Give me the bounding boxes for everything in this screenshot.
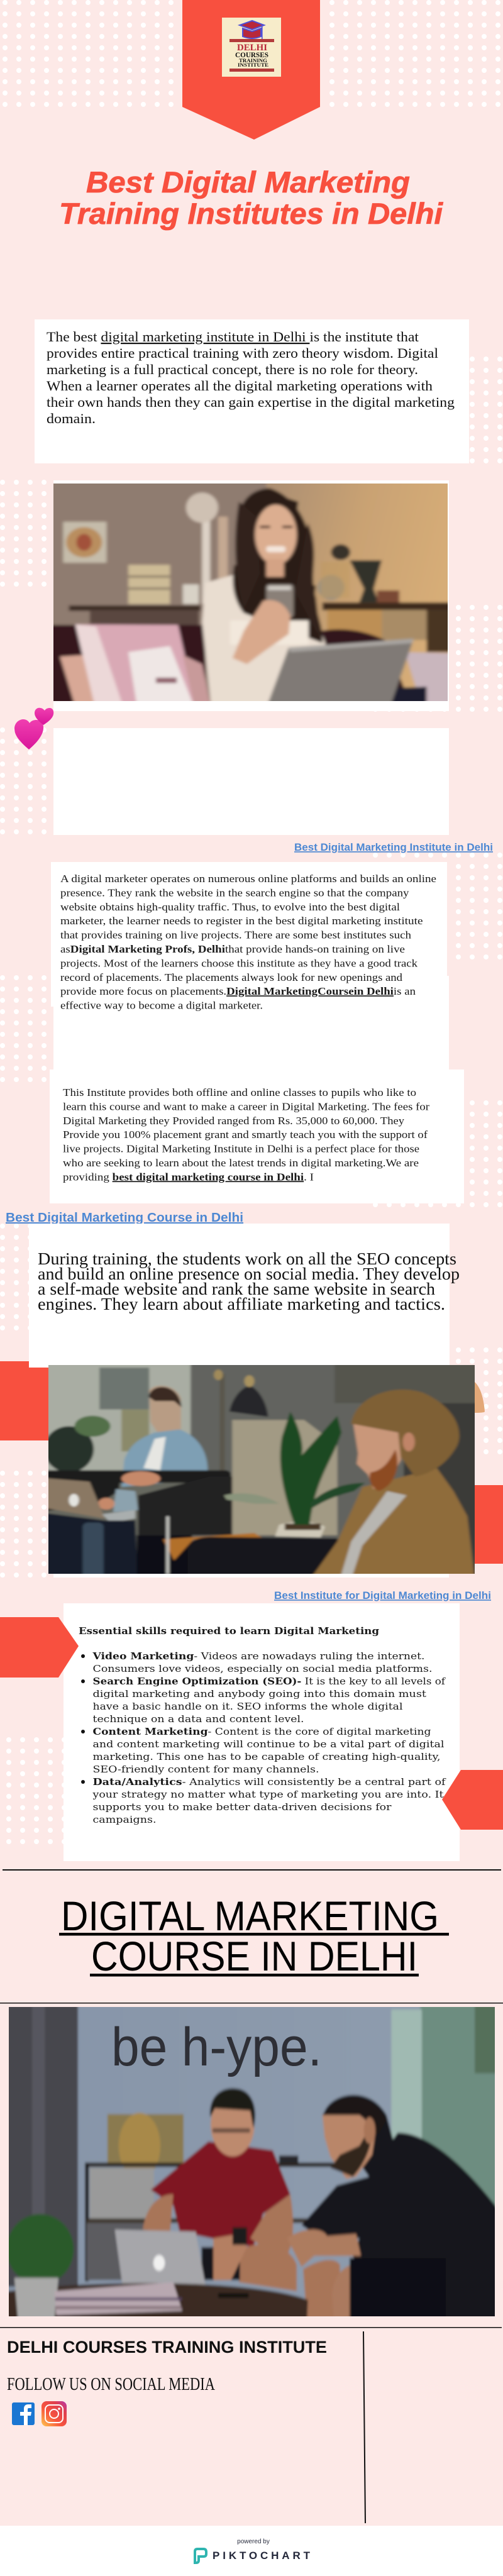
footer: follow us: FOLLOW US ON SOCIAL MEDIA <box>7 2375 216 2394</box>
paragraph: classes and fees: Digital Marketing they Provided ranged from Rs. 35,000 to 60,000. They <box>63 1115 405 1127</box>
paragraph: during training: engines. They learn about affiliate marketing and tactics. <box>38 1295 445 1313</box>
paragraph: classes and fees: live projects. Digital Marketing Institute in Delhi is a perfect place for those <box>63 1143 419 1155</box>
skills bullet list: digital marketing and anybody going into this domain must <box>93 1688 426 1700</box>
heading: digital marketing course in delhi <box>59 1893 449 1979</box>
vertical divider line <box>363 2331 365 2523</box>
skills bullet list: and content marketing will continue to be a vital part of digital <box>93 1739 445 1750</box>
intro paragraph: provides entire practical training with zero theory wisdom. Digital <box>47 345 438 361</box>
logo: TRAINING <box>239 57 267 64</box>
icon: pink hearts <box>14 708 53 749</box>
heading: essential skills: Essential skills required to learn Digital Marketing <box>79 1625 380 1637</box>
photo: two men at laptop: be h-ype. <box>111 2017 322 2077</box>
icon: facebook <box>12 2402 35 2425</box>
heading: digital marketing course in delhi: DIGITAL MARKETING <box>61 1893 439 1939</box>
link: best digital marketing course in delhi: Best Digital Marketing Course in Delhi <box>6 1211 243 1225</box>
skills bullet list: SEO-friendly content for many channels. <box>93 1764 319 1775</box>
footer: powered by piktochart <box>0 2526 503 2576</box>
skills bullet list: campaigns. <box>93 1814 156 1825</box>
intro paragraph: The best digital marketing institute in Delhi is the institute that <box>47 329 419 345</box>
red banner with logo <box>182 0 320 140</box>
skills bullet list: Search Engine Optimization (SEO)- It is the key to all levels of <box>93 1676 446 1687</box>
skills bullet list: marketing. This one has to be capable of creating high-quality, <box>93 1751 440 1762</box>
red arrow shape right <box>442 1770 503 1830</box>
paragraph: digital marketer: marketer, the learner needs to register in the best digital marketing institute <box>60 915 423 927</box>
red accent block left <box>0 1361 48 1440</box>
decorative dot pattern blocks <box>0 0 503 1847</box>
paragraph: classes and fees: This Institute provides both offline and online classes to pupils who like to <box>63 1086 416 1098</box>
paragraph: digital marketer: effective way to become a digital marketer. <box>60 1000 263 1012</box>
skills bullet list: technique on a data and content level. <box>93 1713 304 1725</box>
panel: institute classes text <box>50 1070 464 1203</box>
skills bullet list: Content Marketing - Content is the core of digital marketing <box>93 1726 431 1737</box>
paragraph: digital marketer: A digital marketer operates on numerous online platforms and builds an online <box>60 873 436 885</box>
paragraph: digital marketer <box>60 873 436 1012</box>
paragraph: during training: a self-made website and rank the same website in search <box>38 1280 436 1298</box>
skills bullet list: Data/Analytics - Analytics will consistently be a central part of <box>93 1776 446 1788</box>
title: Best Digital Marketing <box>86 165 410 199</box>
paragraph: digital marketer: asDigital Marketing Profs, Delhi that provide hands-on training on live <box>60 943 405 955</box>
intro paragraph <box>47 329 455 426</box>
intro paragraph: domain. <box>47 411 96 426</box>
skills bullet list: Consumers love videos, especially on social media platforms. <box>93 1663 433 1674</box>
skills bullet list: have a basic handle on it. SEO informs the whole digital <box>93 1701 403 1712</box>
paragraph: classes and fees: Provide you 100% placement grant and smartly teach you with the support of <box>63 1129 428 1141</box>
footer: powered by piktochart: powered by <box>237 2538 270 2545</box>
paragraph: classes and fees: who are seeking to learn about the latest trends in digital marketing.We are <box>63 1157 419 1169</box>
panel: photo of woman with phone and laptop <box>53 480 449 711</box>
skills bullet list: Video Marketing - Videos are nowadays ruling the internet. <box>92 1650 425 1662</box>
paragraph: classes and fees: learn this course and want to make a career in Digital Marketing. The fees for <box>63 1100 429 1112</box>
logo: COURSES <box>235 50 268 59</box>
panel: photo of two men working <box>48 1365 485 1578</box>
intro paragraph: marketing is a full practical concept, there is no role for theory. <box>47 362 418 377</box>
paragraph: during training: and build an online presence on social media. They develop <box>38 1264 460 1283</box>
link: best digital marketing institute in delhi: Best Digital Marketing Institute in Delhi <box>294 841 493 853</box>
logo <box>222 18 281 77</box>
paragraph: digital marketer: presence. They rank the website in the search engine so that the company <box>60 887 409 898</box>
skills bullet list: supports you to make better data-driven decisions for <box>93 1801 392 1813</box>
red accent block right <box>475 1485 503 1564</box>
logo: DELHI <box>237 43 267 53</box>
paragraph: during training <box>38 1249 460 1313</box>
skills bullet list: your strategy no matter what type of marketing you are into. It <box>92 1789 444 1800</box>
panel: empty white card <box>53 728 449 835</box>
red arrow shape left <box>0 1617 79 1678</box>
panel: essential skills <box>0 1603 503 1861</box>
intro paragraph: their own hands then they can gain expertise in the digital marketing <box>47 394 455 410</box>
piktochart logo mark <box>195 2549 206 2563</box>
title: Training Institutes in Delhi <box>59 197 443 230</box>
paragraph: digital marketer: provide more focus on placements. Digital MarketingCoursein Delhi is an <box>60 985 416 997</box>
paragraph: digital marketer: record of placements. The placements always look for new openings and <box>60 971 403 983</box>
paragraph: digital marketer: that provides training on live projects. There are some best institutes such <box>60 929 412 941</box>
footer: institute name: DELHI COURSES TRAINING INSTITUTE <box>7 2338 327 2357</box>
paragraph: classes and fees: providing best digital marketing course in Delhi . I <box>63 1171 314 1183</box>
panel: during training text <box>29 1224 460 1368</box>
logo: INSTITUTE <box>238 62 268 68</box>
title <box>59 165 443 230</box>
paragraph: during training: During training, the students work on all the SEO concepts <box>38 1249 456 1268</box>
panel: intro text <box>35 319 469 463</box>
paragraph: digital marketer: projects. Most of the learners choose this institute as they have a good track <box>60 957 418 969</box>
skills bullet list <box>81 1650 446 1825</box>
footer: powered by piktochart: PIKTOCHART <box>213 2550 311 2562</box>
heading: digital marketing course in delhi: COURSE IN DELHI <box>91 1933 417 1979</box>
icon: instagram <box>41 2401 67 2426</box>
intro paragraph: When a learner operates all the digital marketing operations with <box>47 378 433 394</box>
photo: two men at laptop <box>9 2007 495 2316</box>
paragraph: digital marketer: website obtains high-quality traffic. Thus, to evolve into the best digital <box>60 901 400 913</box>
panel: digital marketer text <box>51 862 449 1070</box>
paragraph: classes and fees <box>63 1086 429 1183</box>
link: best institute for digital marketing in delhi: Best Institute for Digital Marketing in Delhi <box>274 1589 491 1601</box>
